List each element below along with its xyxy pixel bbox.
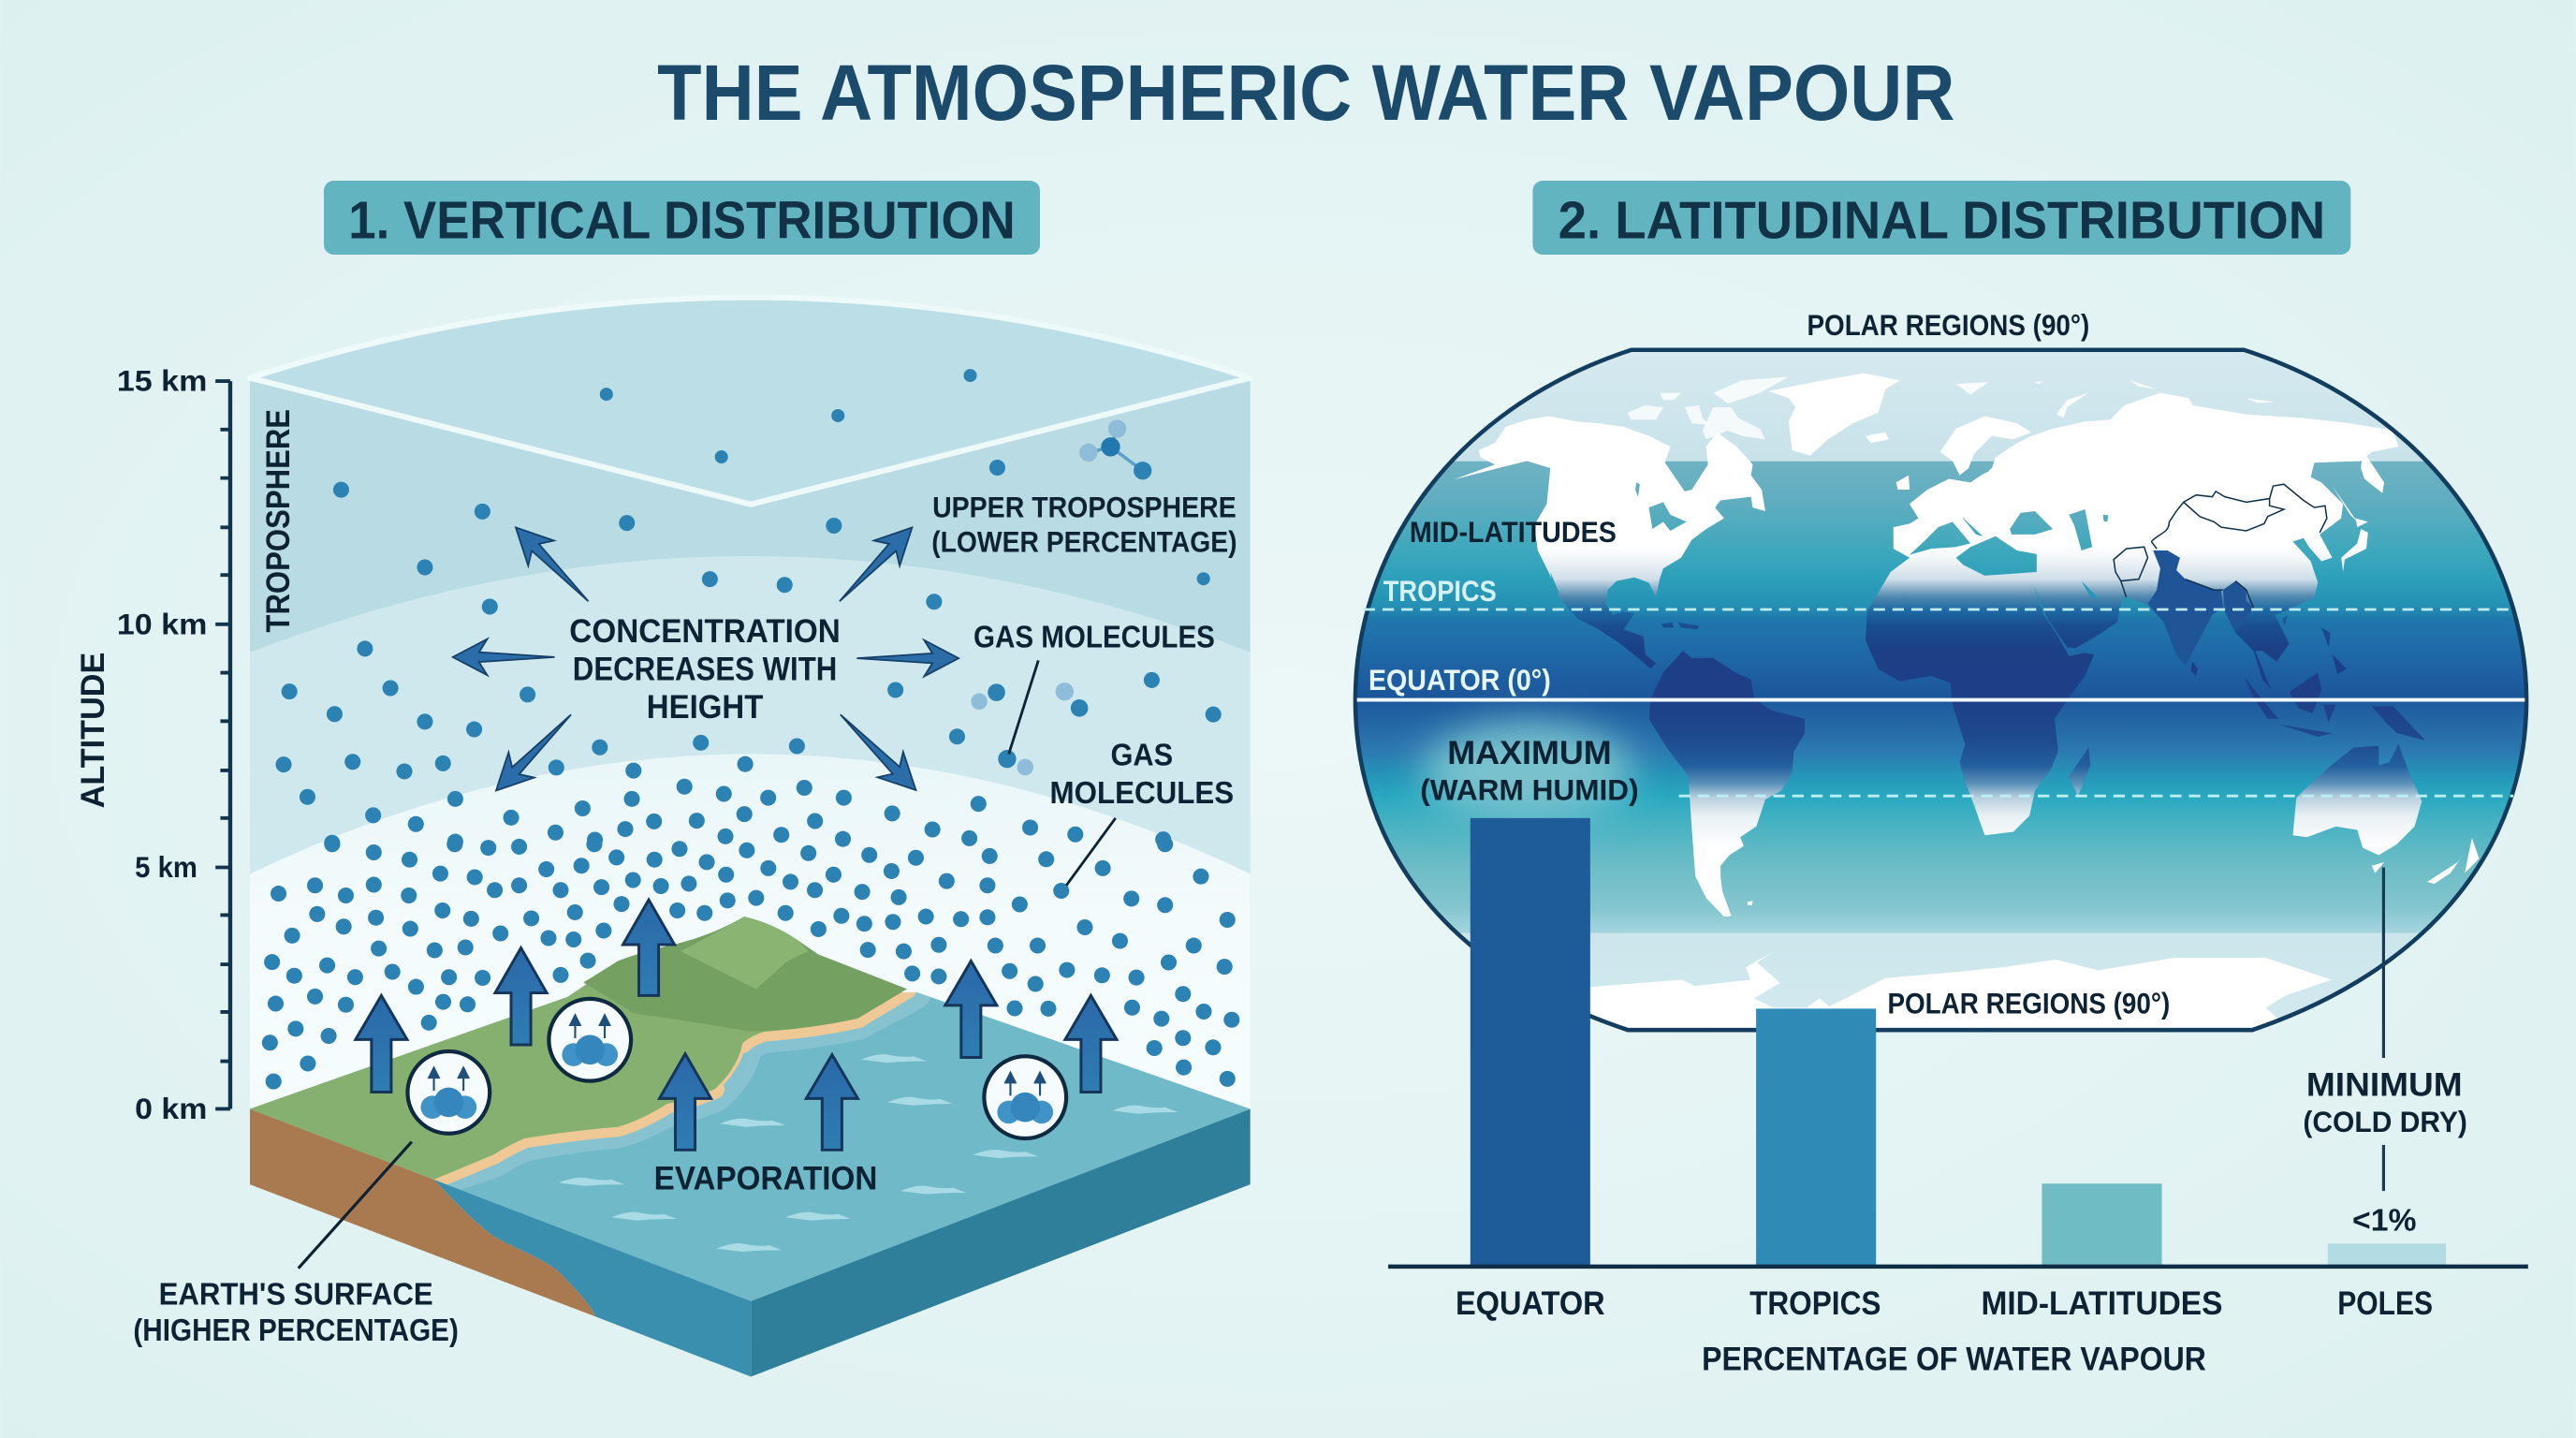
atmosphere column bands bbox=[250, 378, 1251, 1117]
category labels: EQUATOR bbox=[1456, 1285, 1605, 1322]
chart baseline bbox=[1388, 1266, 2528, 1268]
label: tropics: TROPICS bbox=[1383, 574, 1497, 608]
water vapour molecules, dense lower bbox=[270, 844, 1232, 1081]
concentration arrows bbox=[453, 515, 959, 803]
label: upper troposphere bbox=[931, 491, 1237, 559]
callout: concentration decreases: DECREASES WITH bbox=[573, 651, 837, 687]
callout: concentration decreases: HEIGHT bbox=[647, 689, 764, 726]
icon: evaporation cloud 3 bbox=[984, 1056, 1066, 1138]
category labels: MID-LATITUDES bbox=[1981, 1285, 2222, 1322]
bar: tropics bbox=[1756, 1008, 1876, 1267]
icon: evaporation cloud 1 bbox=[407, 1051, 490, 1134]
heading: latitudinal distribution: 2. LATITUDINAL DISTRIBUTION bbox=[1559, 190, 2325, 249]
atmosphere top face bbox=[250, 298, 1251, 505]
label: gas molecules lower with leader: GAS bbox=[1110, 739, 1173, 773]
altitude axis: 10 km bbox=[117, 607, 207, 640]
label: upper troposphere: (LOWER PERCENTAGE) bbox=[931, 525, 1237, 559]
ocean waves bbox=[559, 1054, 1178, 1252]
heading: vertical distribution: 1. VERTICAL DISTRIBUTION bbox=[348, 190, 1016, 249]
label: minimum: (COLD DRY) bbox=[2303, 1105, 2467, 1138]
bar chart bbox=[1388, 818, 2528, 1322]
molecule clusters bbox=[971, 419, 1151, 775]
category labels: TROPICS bbox=[1749, 1285, 1881, 1322]
altitude axis: 0 km bbox=[135, 1092, 207, 1125]
Old World bbox=[1866, 380, 2479, 884]
altitude axis bbox=[117, 364, 230, 1125]
coastline bbox=[434, 989, 914, 1180]
label: gas molecules with leader: GAS MOLECULES bbox=[973, 620, 1215, 654]
label: earth's surface with leader: (HIGHER PERCENTAGE) bbox=[133, 1313, 459, 1348]
label: mid-latitudes: MID-LATITUDES bbox=[1410, 515, 1617, 549]
ocean bands bbox=[1357, 352, 2525, 1019]
ground block: ocean front face bbox=[434, 1180, 751, 1376]
callout: concentration decreases: CONCENTRATION bbox=[569, 613, 841, 650]
latitude lines bbox=[1364, 609, 2513, 796]
label: polar regions top: POLAR REGIONS (90°) bbox=[1807, 308, 2089, 342]
inland seas bbox=[1910, 466, 2108, 656]
axis title: altitude: ALTITUDE bbox=[75, 653, 111, 808]
altitude axis: 15 km bbox=[117, 364, 207, 398]
label: gas molecules lower with leader bbox=[1050, 739, 1234, 886]
callout: concentration decreases bbox=[569, 613, 841, 726]
ground block: right face bbox=[751, 1108, 1251, 1376]
ground block: land side face bbox=[250, 1108, 595, 1316]
North American lakes bbox=[1550, 482, 1719, 594]
icon: evaporation cloud 2 bbox=[549, 999, 631, 1081]
world map bbox=[1354, 348, 2529, 1032]
Antarctica bbox=[1589, 952, 2331, 1028]
label: maximum bbox=[1420, 735, 1639, 807]
Myanmar bbox=[2223, 581, 2253, 633]
label: polar regions bottom: POLAR REGIONS (90°) bbox=[1887, 987, 2170, 1020]
map outline bbox=[1355, 350, 2526, 1030]
water vapour molecules, sparse upper bbox=[607, 375, 1204, 579]
bar: poles bbox=[2328, 1243, 2446, 1267]
label: evaporation: EVAPORATION bbox=[654, 1160, 877, 1196]
label: minimum: MINIMUM bbox=[2306, 1066, 2463, 1103]
panel: vertical distribution diagram bbox=[75, 298, 1251, 1376]
water surface bbox=[250, 992, 1251, 1301]
label: troposphere: TROPOSPHERE bbox=[260, 409, 297, 633]
leader: minimum bbox=[2382, 867, 2384, 1191]
value label: under one percent: <1% bbox=[2352, 1203, 2416, 1238]
altitude axis: 5 km bbox=[135, 850, 198, 884]
bar: mid-latitudes bbox=[2042, 1183, 2162, 1267]
bar: equator bbox=[1471, 818, 1590, 1267]
label: upper troposphere: UPPER TROPOSPHERE bbox=[932, 491, 1237, 524]
axis title: percentage of water vapour: PERCENTAGE OF WATER VAPOUR bbox=[1702, 1341, 2206, 1377]
category labels: POLES bbox=[2337, 1285, 2433, 1322]
label: gas molecules lower with leader: MOLECULES bbox=[1050, 776, 1234, 811]
label: equator: EQUATOR (0°) bbox=[1368, 663, 1551, 697]
country outlines bbox=[2114, 484, 2327, 608]
category labels bbox=[1456, 1285, 2433, 1322]
label: minimum bbox=[2303, 1066, 2467, 1138]
label: maximum: (WARM HUMID) bbox=[1420, 773, 1639, 807]
Arctic islands bbox=[1956, 380, 2275, 418]
label: earth's surface with leader bbox=[133, 1142, 459, 1348]
evaporation arrows bbox=[356, 900, 1117, 1150]
label: earth's surface with leader: EARTH'S SURFACE bbox=[159, 1277, 433, 1312]
panel: latitudinal distribution bbox=[1300, 308, 2576, 1377]
water vapour molecules, mid bbox=[284, 467, 1213, 843]
India bbox=[2147, 550, 2223, 666]
maximum halo bbox=[1423, 723, 1632, 821]
title: THE ATMOSPHERIC WATER VAPOUR bbox=[657, 49, 1954, 137]
Americas and Greenland bbox=[1454, 374, 1910, 917]
label: maximum: MAXIMUM bbox=[1447, 735, 1612, 771]
land surface bbox=[250, 917, 907, 1180]
Canadian Arctic islands bbox=[1628, 376, 1789, 439]
label: gas molecules with leader bbox=[973, 620, 1215, 754]
mountain bbox=[583, 917, 907, 1032]
